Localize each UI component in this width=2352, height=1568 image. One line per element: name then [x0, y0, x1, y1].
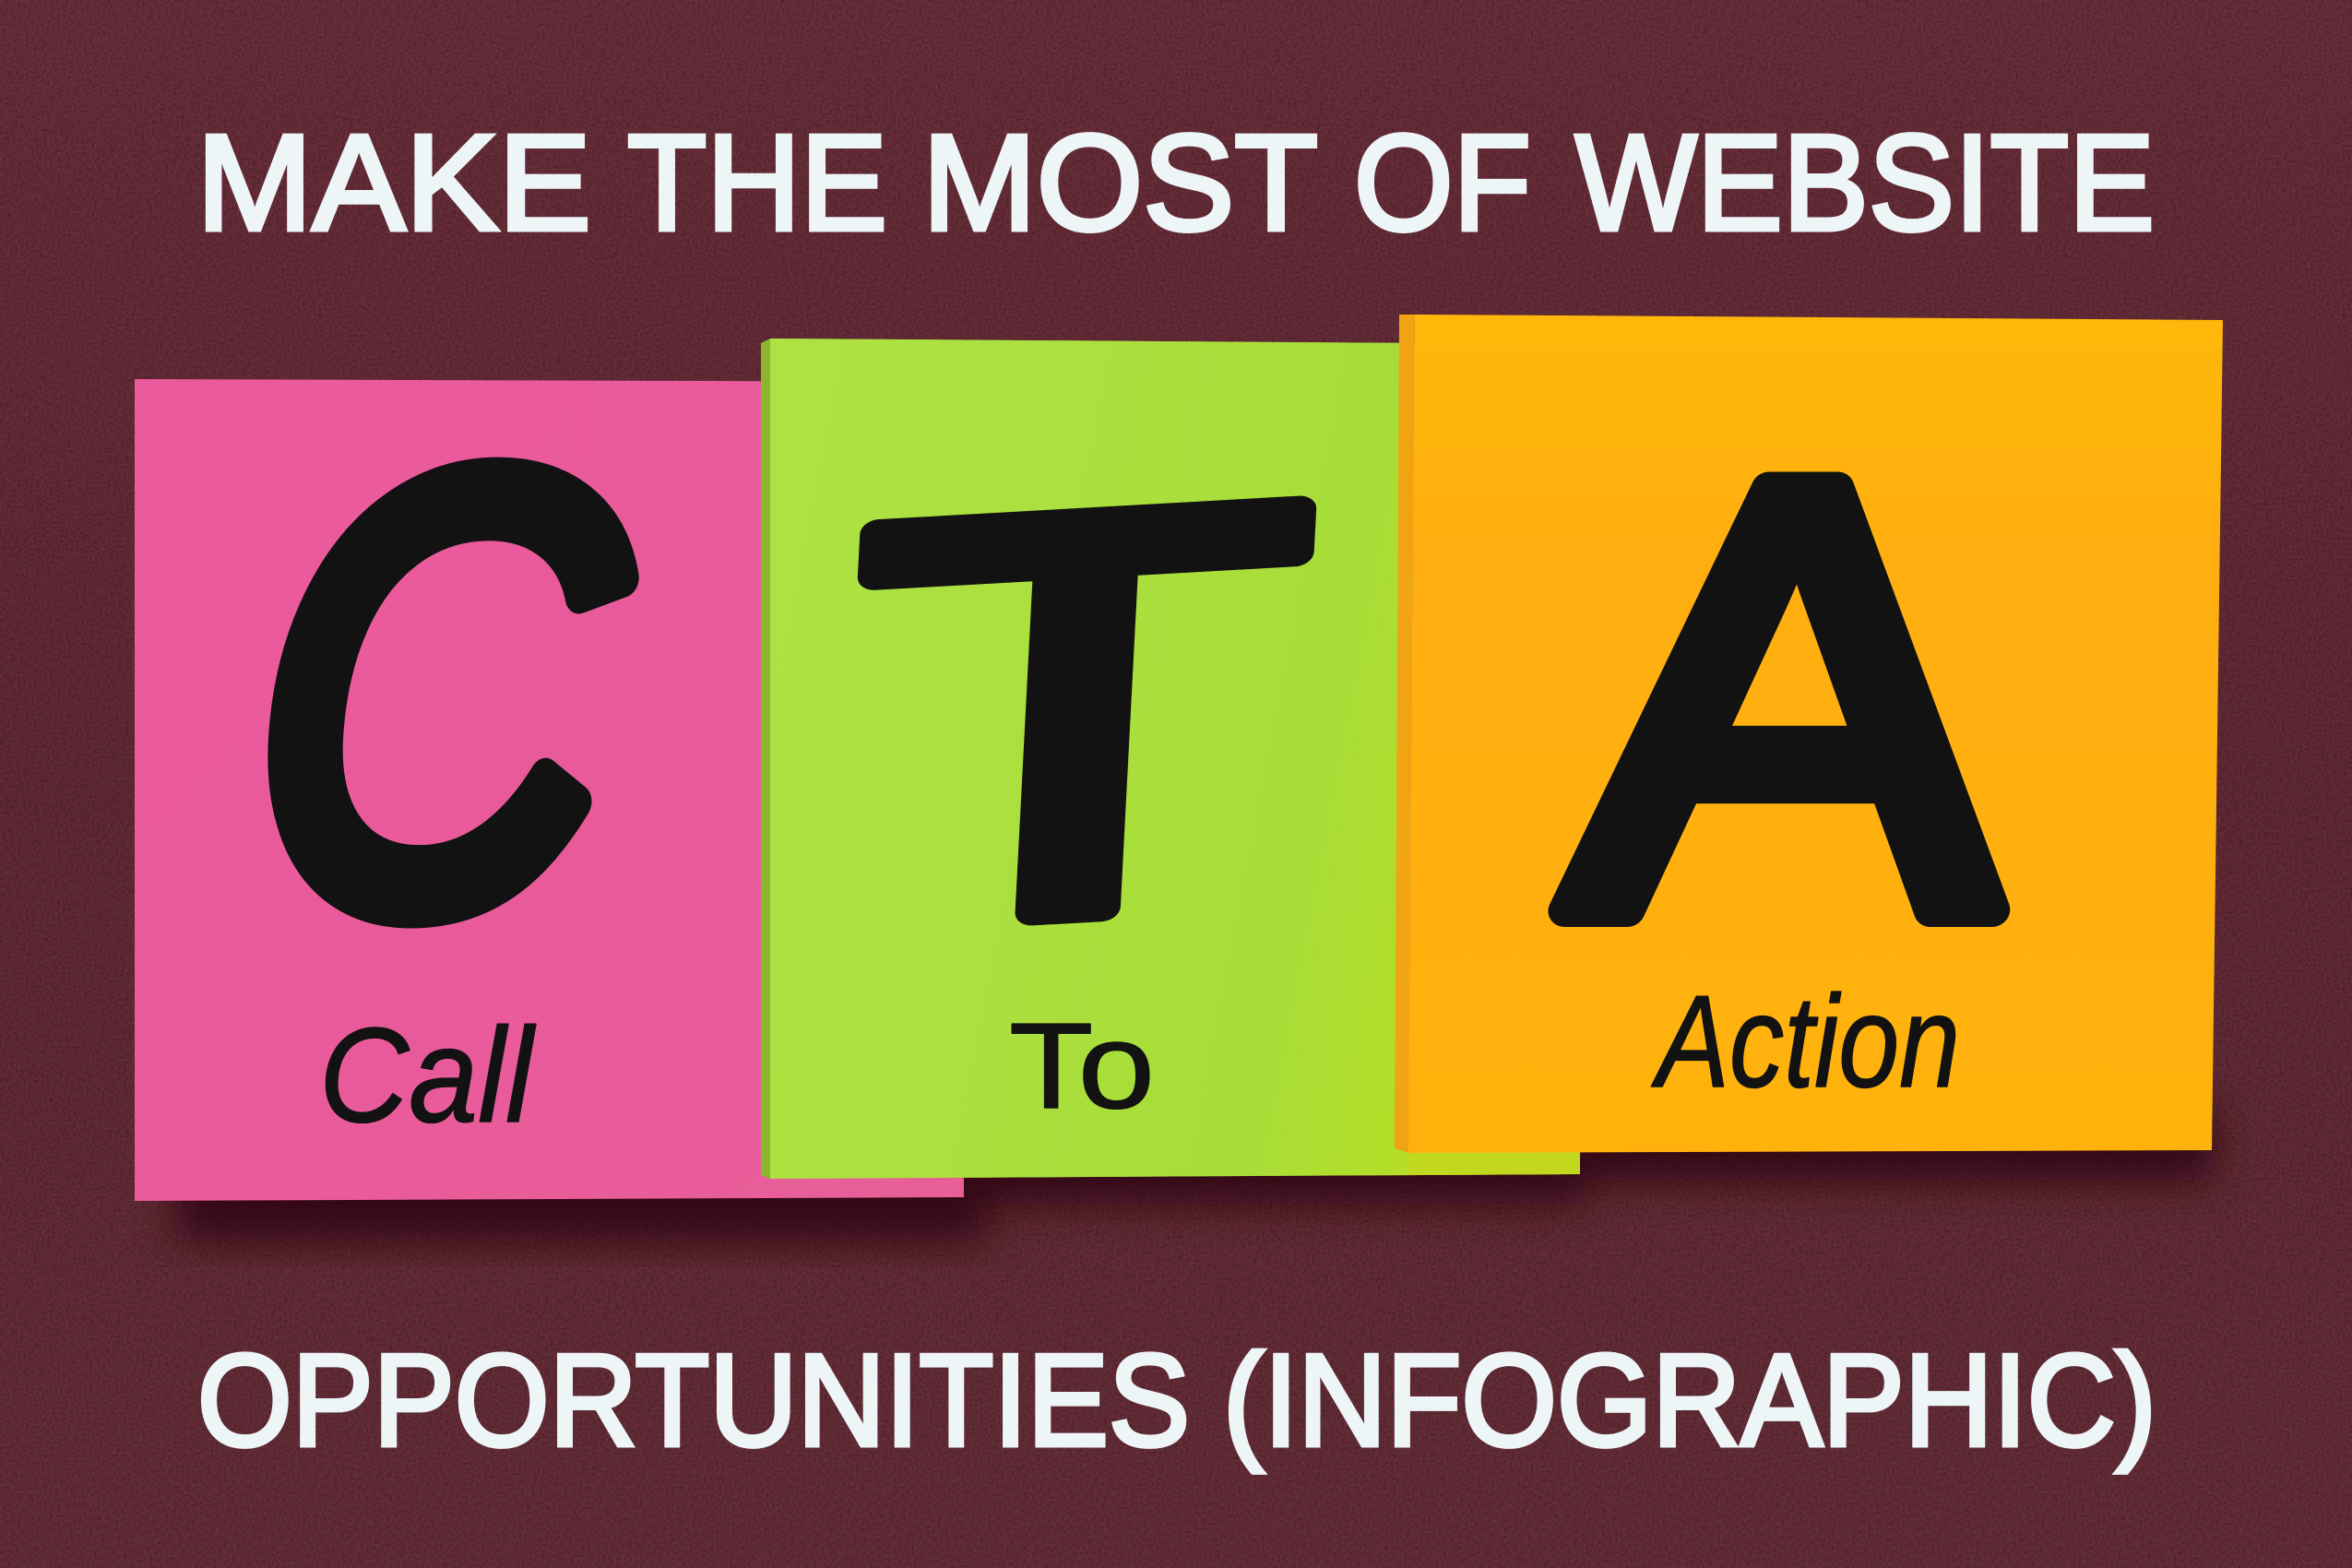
title: top line: OF — [1354, 107, 1531, 259]
note shadows — [175, 1107, 2214, 1241]
big letter T: T — [835, 386, 1322, 1042]
title: top line: THE — [627, 107, 887, 259]
word: Call: Call — [319, 1000, 536, 1150]
title: top line: MAKE — [196, 107, 591, 259]
panel: green note T — [761, 339, 1580, 1179]
title: bottom line: (INFOGRAPHIC) — [1223, 1327, 2156, 1474]
panel: orange note A — [1395, 315, 2223, 1153]
title: top line: WEBSITE — [1575, 107, 2155, 259]
word: Action: Action — [1651, 968, 1960, 1115]
word: To: To — [1009, 998, 1155, 1134]
title: top line — [196, 107, 2155, 259]
panel: pink note C — [135, 349, 964, 1201]
big letter A: A — [1558, 355, 2026, 1040]
title: bottom line: OPPORTUNITIES — [197, 1327, 1190, 1474]
title: top line: MOST — [922, 107, 1318, 259]
big letter C: C — [235, 349, 644, 1034]
title: bottom line — [197, 1327, 2156, 1474]
